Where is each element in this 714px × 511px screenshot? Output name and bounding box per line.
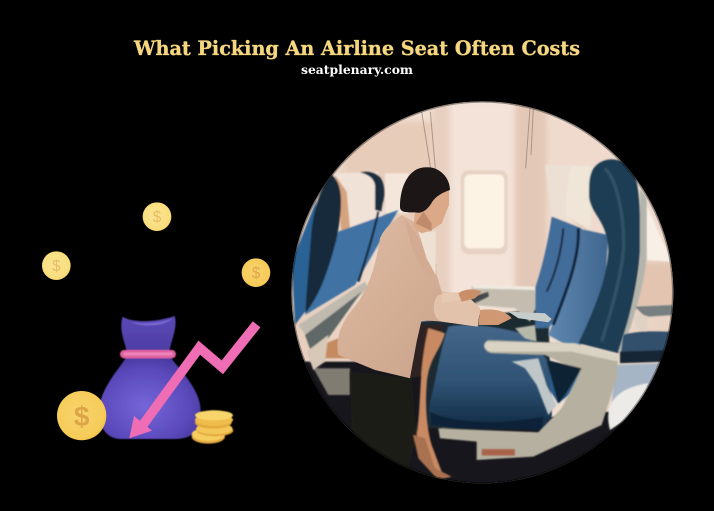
seat cushion <box>429 325 552 430</box>
main seat back <box>535 159 647 403</box>
armrest behind <box>467 285 536 322</box>
shadow behind seat cushion <box>418 308 552 428</box>
curtain seams <box>421 108 534 169</box>
vignette on edge <box>291 101 673 483</box>
icon: coin stack <box>192 410 233 444</box>
arrow: pink falling trend line <box>143 324 257 424</box>
seat armrest in hand <box>508 312 552 322</box>
icon: floating coin right: $ <box>252 265 261 282</box>
icon: floating coin top <box>143 202 171 231</box>
far seats right <box>608 305 673 430</box>
icon: floating coin left <box>42 251 71 280</box>
dark lower cabin <box>304 360 629 484</box>
title: What Picking An Airline Seat Often Costs <box>133 37 580 60</box>
icon: purple money bag <box>99 316 201 439</box>
arrow head <box>129 416 152 438</box>
woman: hands <box>458 289 512 325</box>
crumpled wrapper <box>512 358 557 415</box>
icon: large coin: $ <box>74 401 90 432</box>
window <box>461 170 508 254</box>
subtitle: website: seatplenary.com <box>301 63 413 77</box>
icon: floating coin top: $ <box>153 209 162 226</box>
woman: legs and skirt <box>350 325 452 480</box>
woman: head and hair <box>400 167 450 233</box>
far window right <box>647 205 672 262</box>
icon: floating coin left: $ <box>52 258 61 275</box>
icon: floating coin right <box>242 258 270 287</box>
window left <box>385 173 408 213</box>
front seat left (headrest cover and back) <box>292 172 398 395</box>
cabin wall <box>285 95 685 495</box>
photo: woman choosing an airline seat <box>285 95 685 495</box>
front armrest <box>438 340 618 460</box>
money bag illustration group <box>42 202 270 444</box>
icon: large coin <box>57 391 106 440</box>
infographic canvas <box>42 40 674 484</box>
woman: beige blazer <box>337 215 480 378</box>
